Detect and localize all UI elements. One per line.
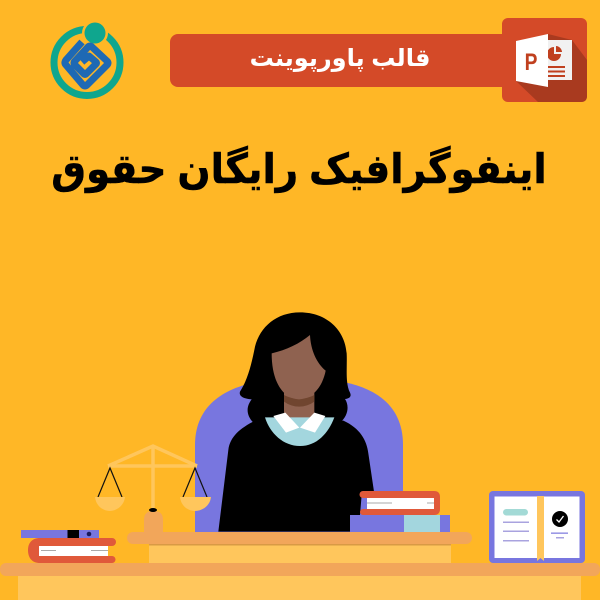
face	[272, 335, 326, 399]
icon: PowerPoint: P	[525, 48, 537, 76]
neck shadow	[284, 395, 314, 407]
teal collar	[265, 417, 334, 446]
left book stack	[21, 530, 116, 563]
desk	[127, 532, 472, 564]
right book stack	[350, 491, 450, 532]
open book	[489, 491, 585, 563]
neck	[284, 390, 314, 428]
title: اینفوگرافیک رایگان حقوق	[51, 145, 547, 193]
banner	[170, 34, 515, 87]
robe	[218, 421, 374, 532]
banner text: قالب پاورپوینت	[250, 45, 430, 72]
scales	[95, 446, 211, 532]
floor table	[0, 563, 600, 600]
judge figure	[218, 312, 374, 532]
icon: PowerPoint	[502, 18, 587, 102]
logo	[54, 20, 120, 96]
chair	[195, 380, 403, 532]
white collar	[273, 413, 325, 433]
hair	[240, 312, 351, 423]
